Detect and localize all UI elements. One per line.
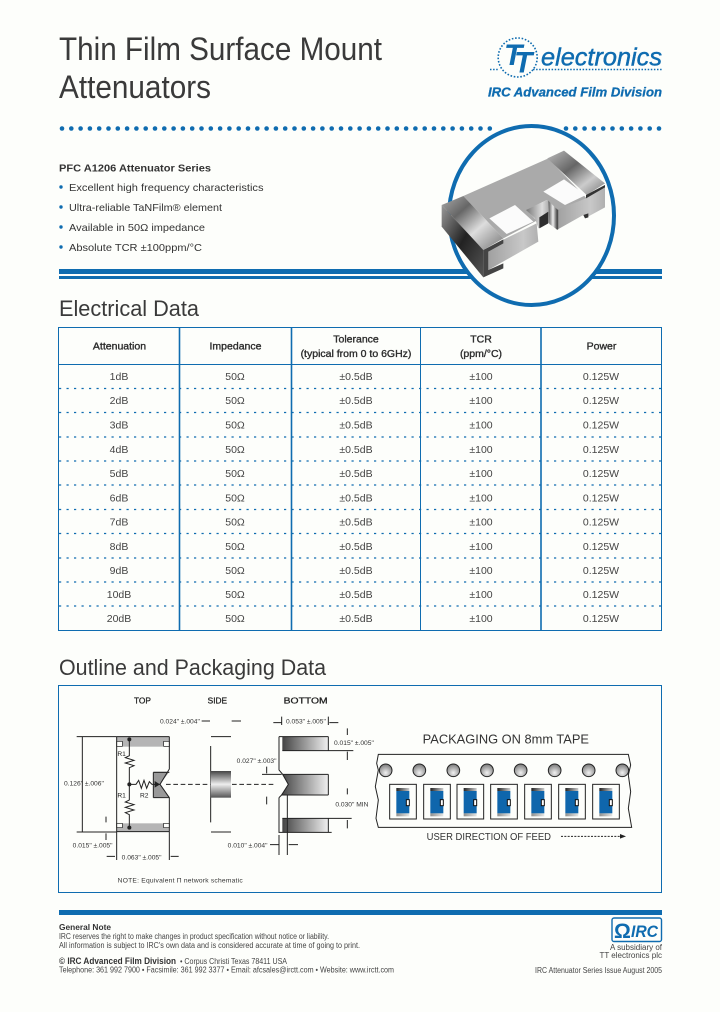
table body: 0.125W xyxy=(583,541,619,553)
chip top surface xyxy=(463,158,587,238)
table body: ±0.5dB xyxy=(339,468,373,480)
dimension values: 0.015" ±.005" xyxy=(73,843,113,850)
view labels: TOP xyxy=(134,695,151,705)
chip left end xyxy=(442,205,483,277)
table body: 50Ω xyxy=(225,444,245,456)
table body: 9dB xyxy=(110,565,128,577)
panel: outline and packaging xyxy=(58,686,662,892)
product photo circle xyxy=(442,126,614,305)
chip right end xyxy=(557,185,605,230)
dimension values: 0.126" ±.006" xyxy=(64,781,104,788)
table body: 5dB xyxy=(110,468,128,480)
chip front face xyxy=(488,223,538,270)
table body: 0.125W xyxy=(583,516,619,528)
double rule xyxy=(59,269,662,279)
table body: ±0.5dB xyxy=(339,492,373,504)
table body: ±0.5dB xyxy=(339,589,373,601)
table header: Tolerance xyxy=(333,334,379,346)
view labels: BOTTOM xyxy=(284,695,328,705)
bullet list: Available in 50Ω impedance xyxy=(69,222,205,234)
dimension values: 0.024" ±.004" xyxy=(160,719,200,726)
table body: 0.125W xyxy=(583,613,619,625)
title: Thin Film Surface Mount xyxy=(59,31,382,67)
table body: ±100 xyxy=(469,420,493,432)
logo wordmark: electronics xyxy=(541,44,662,72)
table header: (ppm/°C) xyxy=(460,348,502,360)
table body: ±100 xyxy=(469,541,493,553)
table body: 8dB xyxy=(110,541,128,553)
bullet list xyxy=(59,182,263,254)
table body: 7dB xyxy=(110,516,128,528)
table header: Power xyxy=(587,340,617,352)
general note: All information is subject to IRC's own data and is considered accurate at time of going to print. xyxy=(59,941,360,950)
table body: 50Ω xyxy=(225,589,245,601)
bullet list: Excellent high frequency characteristics xyxy=(69,182,264,194)
dimension values xyxy=(64,718,374,861)
logo dotted rule xyxy=(490,68,662,70)
table header: Attenuation xyxy=(93,340,146,352)
top view xyxy=(117,737,169,832)
table body: 2dB xyxy=(110,395,128,407)
table body: 10dB xyxy=(107,589,131,601)
dotted divider xyxy=(60,126,661,131)
table body: 20dB xyxy=(107,613,131,625)
table body: ±100 xyxy=(469,565,493,577)
table body: 4dB xyxy=(110,444,128,456)
centre line xyxy=(166,783,273,786)
table body: ±100 xyxy=(469,516,493,528)
bottom view xyxy=(279,737,353,855)
outline drawing xyxy=(64,695,374,885)
view labels: SIDE xyxy=(208,695,228,705)
title xyxy=(59,31,382,105)
chip resistor illustration xyxy=(442,151,605,277)
tape pockets xyxy=(390,784,619,819)
icon: TT dotted circle xyxy=(498,38,537,77)
table body: 50Ω xyxy=(225,468,245,480)
table body: ±100 xyxy=(469,468,493,480)
dimension values: 0.063" ±.005" xyxy=(122,854,162,861)
feed direction label: USER DIRECTION OF FEED xyxy=(427,832,551,843)
dimension lines xyxy=(77,717,347,860)
table: electrical data xyxy=(58,327,662,631)
footer text xyxy=(59,922,394,974)
resistor labels: R1 xyxy=(117,751,126,758)
table body: ±0.5dB xyxy=(339,516,373,528)
contact pad left xyxy=(489,205,533,234)
dimension values: 0.027" ±.003" xyxy=(237,758,277,765)
table body: 50Ω xyxy=(225,516,245,528)
table header: Impedance xyxy=(210,340,262,352)
table body: ±0.5dB xyxy=(339,444,373,456)
series features text xyxy=(59,162,264,254)
table body: ±0.5dB xyxy=(339,420,373,432)
contact details xyxy=(59,956,394,974)
contact details: © IRC Advanced Film Division xyxy=(59,956,176,966)
subsidiary and issue text: TT electronics plc xyxy=(599,951,662,960)
footer rule xyxy=(59,910,662,915)
view labels xyxy=(134,695,328,705)
subsidiary and issue text: IRC Attenuator Series Issue August 2005 xyxy=(535,966,662,975)
table body: ±0.5dB xyxy=(339,541,373,553)
heading: Electrical Data: Electrical Data xyxy=(59,296,199,321)
dimension values: 0.015" ±.005" xyxy=(334,740,374,747)
series heading: PFC A1206 Attenuator Series xyxy=(59,162,211,174)
arrow: feed direction xyxy=(561,834,626,839)
IRC wordmark: IRC xyxy=(631,922,659,941)
bullet list: Absolute TCR ±100ppm/°C xyxy=(69,242,202,254)
heading: Outline and Packaging Data: Outline and Packaging Data xyxy=(59,655,326,680)
general note xyxy=(59,922,360,950)
dimension values: 0.053" ±.005" xyxy=(286,718,326,725)
table body xyxy=(107,371,619,625)
division name: IRC Advanced Film Division xyxy=(488,86,662,100)
table body: 0.125W xyxy=(583,492,619,504)
dimension values: 0.010" ±.004" xyxy=(228,842,268,849)
logo: IRC xyxy=(612,918,662,943)
table body: 0.125W xyxy=(583,420,619,432)
table header: TCR xyxy=(470,334,492,346)
tape outline xyxy=(375,754,632,827)
packaging heading: PACKAGING ON 8mm TAPE xyxy=(423,731,589,746)
table body: 1dB xyxy=(110,371,128,383)
side view xyxy=(211,737,231,832)
table body: 3dB xyxy=(110,420,128,432)
table body: 0.125W xyxy=(583,589,619,601)
table body: ±100 xyxy=(469,371,493,383)
table body: ±0.5dB xyxy=(339,395,373,407)
table body: ±100 xyxy=(469,444,493,456)
notch xyxy=(526,200,558,229)
table grid xyxy=(58,327,662,631)
table body: 0.125W xyxy=(583,395,619,407)
logo letter second T: T xyxy=(514,46,535,80)
table body: 50Ω xyxy=(225,371,245,383)
table body: ±0.5dB xyxy=(339,613,373,625)
table body: 50Ω xyxy=(225,395,245,407)
table body: 50Ω xyxy=(225,613,245,625)
table body: ±100 xyxy=(469,395,493,407)
table body: ±100 xyxy=(469,492,493,504)
general note: IRC reserves the right to make changes in product specification without notice or liability. xyxy=(59,932,329,941)
general note: General Note xyxy=(59,922,111,932)
logo letters TT: T xyxy=(504,39,525,72)
sprocket holes xyxy=(379,764,629,777)
packaging drawing xyxy=(375,731,632,843)
table body: ±100 xyxy=(469,613,493,625)
contact details: Telephone: 361 992 7900 • Facsimile: 361 992 3377 • Email: afcsales@irctt.com • Website: www.irctt.com xyxy=(59,966,394,974)
table body: 50Ω xyxy=(225,541,245,553)
table body: ±0.5dB xyxy=(339,371,373,383)
note: NOTE: Equivalent Π network schematic xyxy=(118,878,243,885)
table header: (typical from 0 to 6GHz) xyxy=(301,348,411,360)
chip left cap xyxy=(442,196,503,250)
contact details: • Corpus Christi Texas 78411 USA xyxy=(180,957,288,966)
icon: omega: Ω xyxy=(614,920,631,943)
table body: 50Ω xyxy=(225,420,245,432)
chip right cap xyxy=(547,151,605,195)
table header xyxy=(93,334,617,360)
table body: ±100 xyxy=(469,589,493,601)
table body: 0.125W xyxy=(583,371,619,383)
table body: 50Ω xyxy=(225,492,245,504)
contact pad right xyxy=(543,179,586,205)
resistor labels: R2 xyxy=(140,792,149,799)
table body: 0.125W xyxy=(583,565,619,577)
resistor labels: R1 xyxy=(117,792,126,799)
table body: 6dB xyxy=(110,492,128,504)
resistor labels xyxy=(117,751,149,799)
title: Attenuators xyxy=(59,69,211,105)
table body: 0.125W xyxy=(583,468,619,480)
subsidiary and issue text: A subsidiary of xyxy=(610,943,663,952)
table body: ±0.5dB xyxy=(339,565,373,577)
subsidiary and issue text xyxy=(535,943,663,975)
bullet list: Ultra-reliable TaNFilm® element xyxy=(69,202,222,214)
table body: 50Ω xyxy=(225,565,245,577)
dimension values: 0.030" MIN xyxy=(335,802,369,809)
table body: 0.125W xyxy=(583,444,619,456)
logo: TT electronics xyxy=(488,38,662,100)
